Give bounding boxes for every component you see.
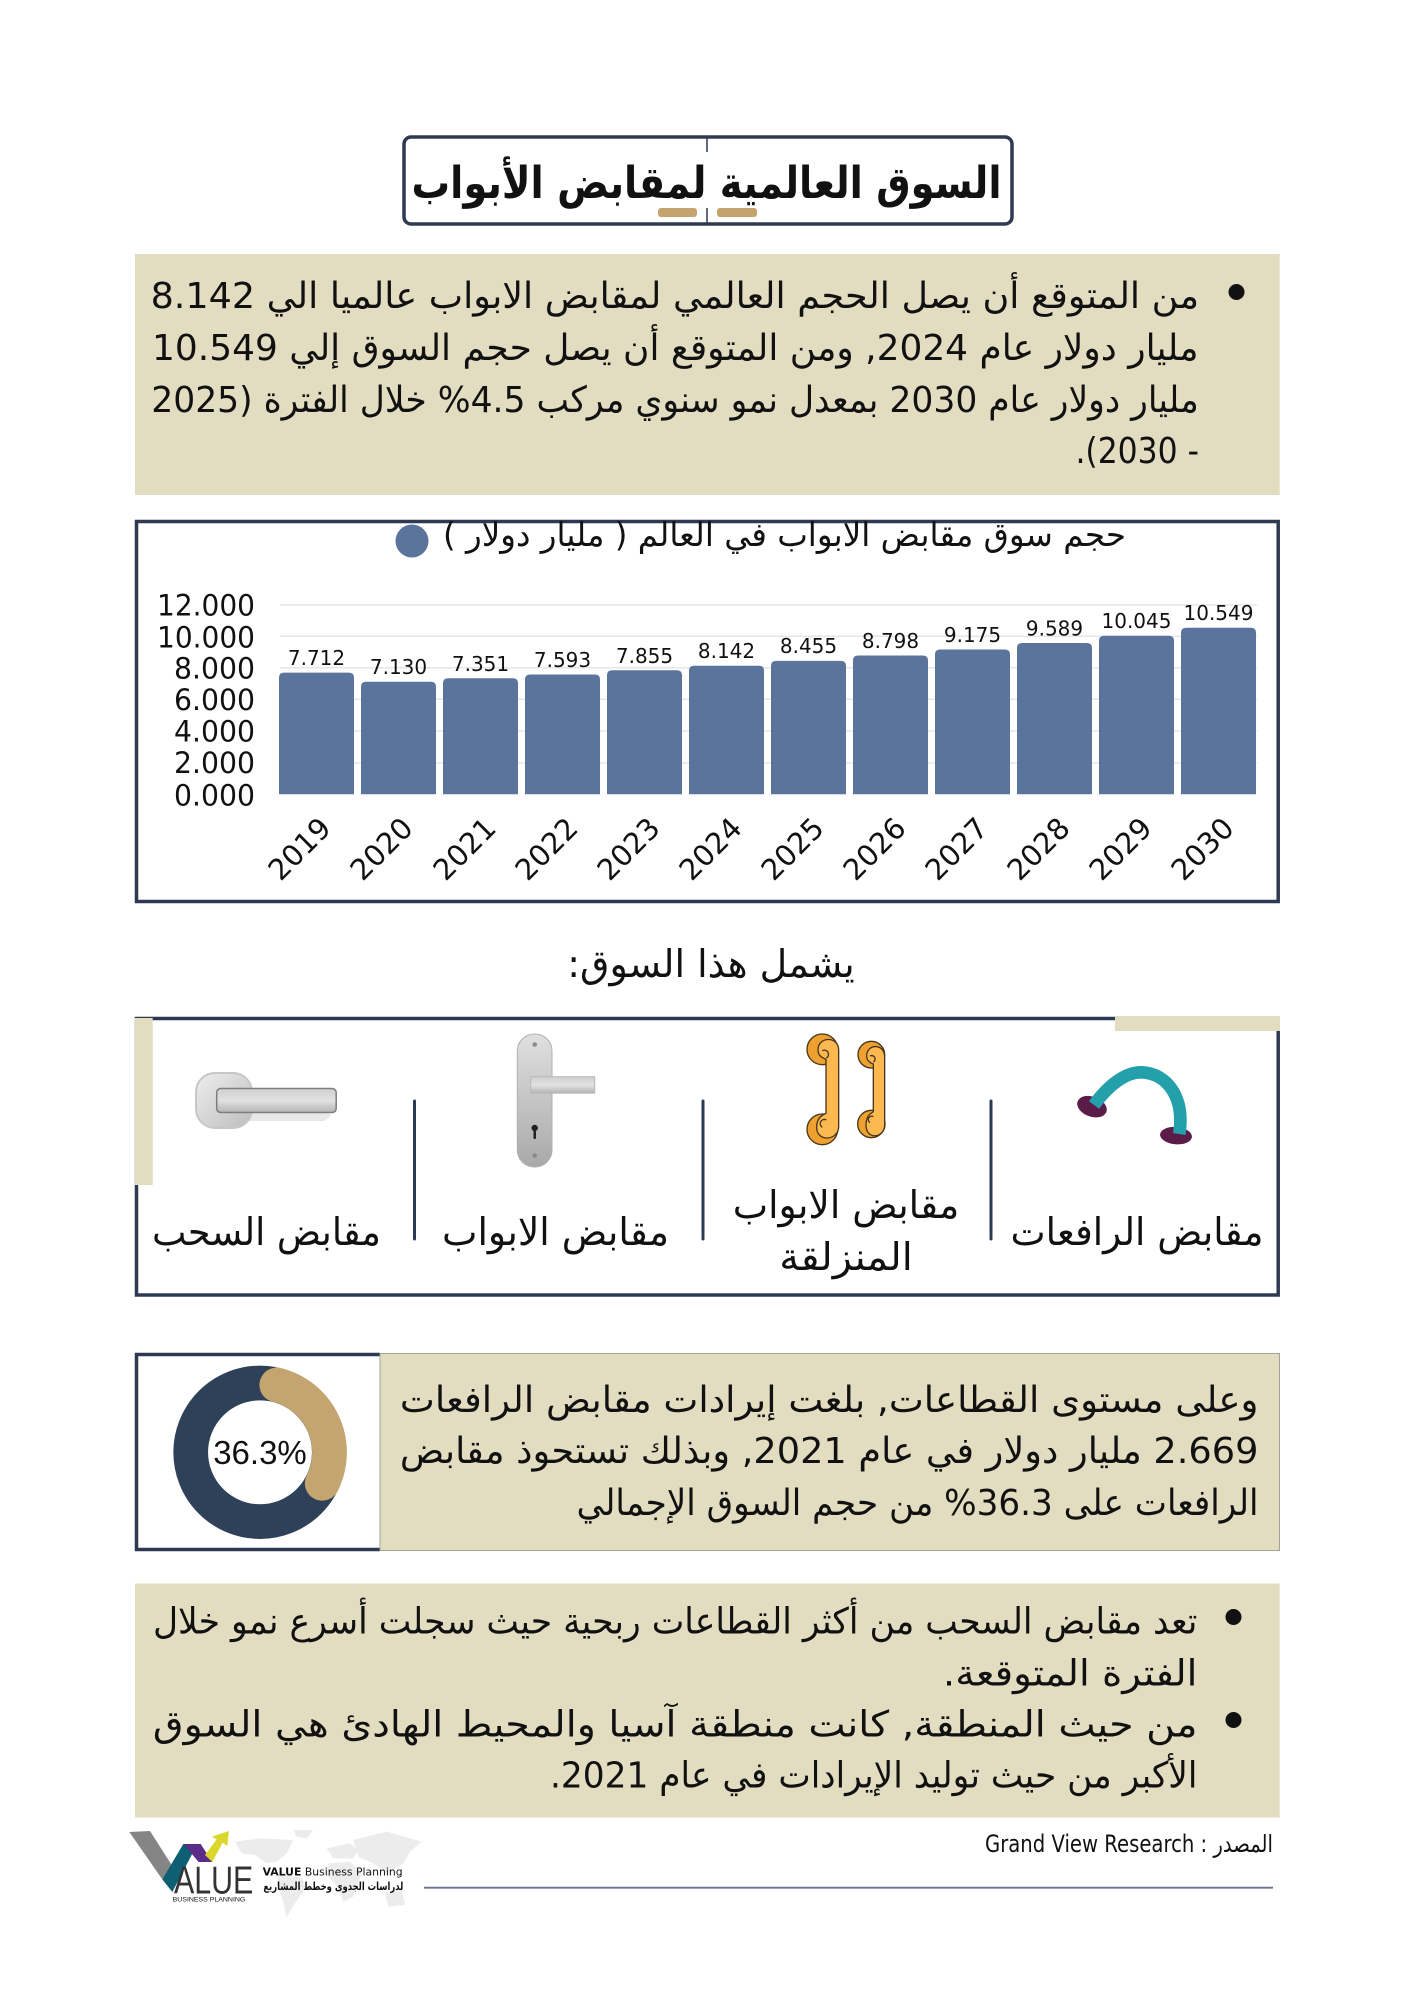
logo company name: VALUE Business Planning bbox=[263, 1866, 403, 1879]
share text: وعلى مستوى القطاعات, بلغت إيرادات مقابض الرافعات bbox=[400, 1380, 1258, 1421]
icon: lever handle bbox=[1074, 1072, 1193, 1146]
panel: market size summary bbox=[135, 254, 1280, 495]
section heading: يشمل هذا السوق: bbox=[567, 942, 855, 987]
icon: door handle bbox=[517, 1034, 595, 1167]
findings text: الفترة المتوقعة. bbox=[943, 1654, 1197, 1694]
source note: المصدر : Grand View Research bbox=[985, 1830, 1273, 1858]
y axis labels: 2.000 bbox=[174, 746, 255, 780]
data labels: 8.798 bbox=[862, 629, 919, 653]
title text: السوق العالمية لمقابض الأبواب bbox=[412, 156, 1002, 209]
logo tagline: BUSINESS PLANNING bbox=[173, 1897, 246, 1903]
y axis labels: 12.000 bbox=[157, 589, 255, 623]
share text: 2.669 مليار دولار في عام 2021, وبذلك تستحوذ مقابض bbox=[400, 1431, 1258, 1472]
label: lever handles: مقابض الرافعات bbox=[1010, 1210, 1264, 1255]
findings text: من حيث المنطقة, كانت منطقة آسيا والمحيط الهادئ هي السوق bbox=[153, 1702, 1197, 1746]
x axis labels: 2022 bbox=[508, 811, 585, 887]
findings text: الأكبر من حيث توليد الإيرادات في عام 2021. bbox=[550, 1752, 1197, 1796]
y axis labels: 8.000 bbox=[174, 652, 255, 686]
findings text bbox=[153, 1598, 1197, 1796]
bullets bbox=[1226, 1609, 1242, 1728]
x axis labels: 2027 bbox=[918, 811, 995, 887]
logo mark bbox=[129, 1831, 229, 1892]
x axis labels: 2023 bbox=[590, 811, 667, 887]
data labels: 8.142 bbox=[698, 639, 755, 663]
bars bbox=[279, 628, 1256, 794]
x axis labels: 2020 bbox=[343, 811, 420, 887]
summary text: - 2030). bbox=[1075, 431, 1199, 472]
data labels: 9.175 bbox=[944, 623, 1001, 647]
x axis labels: 2021 bbox=[426, 811, 503, 887]
x axis labels: 2024 bbox=[672, 811, 749, 887]
chart title: حجم سوق مقابض الابواب في العالم ( مليار دولار ) bbox=[443, 515, 1126, 555]
y axis labels: 0.000 bbox=[174, 779, 255, 813]
y axis labels bbox=[157, 589, 255, 813]
world map bbox=[235, 1830, 422, 1917]
data labels: 7.593 bbox=[534, 648, 591, 672]
bullet bbox=[1228, 284, 1244, 300]
data labels: 8.455 bbox=[780, 634, 837, 658]
x axis labels: 2026 bbox=[836, 811, 913, 887]
label: sliding door handles: مقابض الابواب bbox=[733, 1183, 959, 1228]
logo arabic tagline: لدراسات الجدوى وخطط المشاريع bbox=[263, 1879, 403, 1893]
data labels: 10.549 bbox=[1184, 601, 1253, 625]
y axis labels: 4.000 bbox=[174, 715, 255, 749]
data labels: 7.130 bbox=[370, 655, 427, 679]
findings text: تعد مقابض السحب من أكثر القطاعات ربحية حيث سجلت أسرع نمو خلال bbox=[153, 1598, 1197, 1642]
data labels bbox=[288, 601, 1253, 679]
data labels: 10.045 bbox=[1102, 609, 1171, 633]
summary text: مليار دولار عام 2024, ومن المتوقع أن يصل حجم السوق إلي 10.549 bbox=[152, 324, 1199, 369]
footer rule bbox=[424, 1887, 1273, 1889]
x axis labels: 2019 bbox=[261, 811, 338, 887]
data labels: 9.589 bbox=[1026, 616, 1083, 640]
label: pull handles: مقابض السحب bbox=[152, 1210, 381, 1255]
data labels: 7.712 bbox=[288, 646, 345, 670]
summary text bbox=[151, 272, 1199, 472]
label: door handles: مقابض الابواب bbox=[442, 1210, 669, 1255]
panel: handle types bbox=[135, 1016, 1280, 1295]
title box bbox=[404, 136, 1012, 225]
label: sliding door handles bbox=[733, 1183, 959, 1280]
logo bbox=[129, 1830, 422, 1917]
data labels: 7.855 bbox=[616, 644, 673, 668]
label: sliding door handles: المنزلقة bbox=[779, 1235, 913, 1280]
logo wordmark: ALUE bbox=[174, 1859, 253, 1902]
x axis labels: 2029 bbox=[1082, 811, 1159, 887]
panel: key findings bbox=[135, 1584, 1280, 1818]
x axis labels bbox=[261, 811, 1241, 887]
summary text: من المتوقع أن يصل الحجم العالمي لمقابض الابواب عالميا الي 8.142 bbox=[151, 272, 1199, 317]
chart legend dot bbox=[396, 524, 428, 558]
y axis labels: 6.000 bbox=[174, 683, 255, 717]
panel: lever share bbox=[136, 1354, 1280, 1550]
icon: pull handle bbox=[196, 1073, 336, 1128]
y axis labels: 10.000 bbox=[157, 621, 255, 655]
summary text: مليار دولار عام 2030 بمعدل نمو سنوي مركب 4.5% خلال الفترة (2025 bbox=[151, 380, 1199, 421]
x axis labels: 2028 bbox=[1000, 811, 1077, 887]
x axis labels: 2025 bbox=[754, 811, 831, 887]
panel: bar chart market size bbox=[136, 515, 1278, 902]
icon: sliding door handles bbox=[807, 1034, 885, 1145]
share text bbox=[400, 1380, 1258, 1524]
donut chart bbox=[191, 1383, 329, 1522]
donut chart: 36.3% bbox=[213, 1434, 307, 1471]
data labels: 7.351 bbox=[452, 652, 509, 676]
share text: الرافعات على 36.3% من حجم السوق الإجمالي bbox=[576, 1483, 1258, 1524]
x axis labels: 2030 bbox=[1164, 811, 1241, 887]
